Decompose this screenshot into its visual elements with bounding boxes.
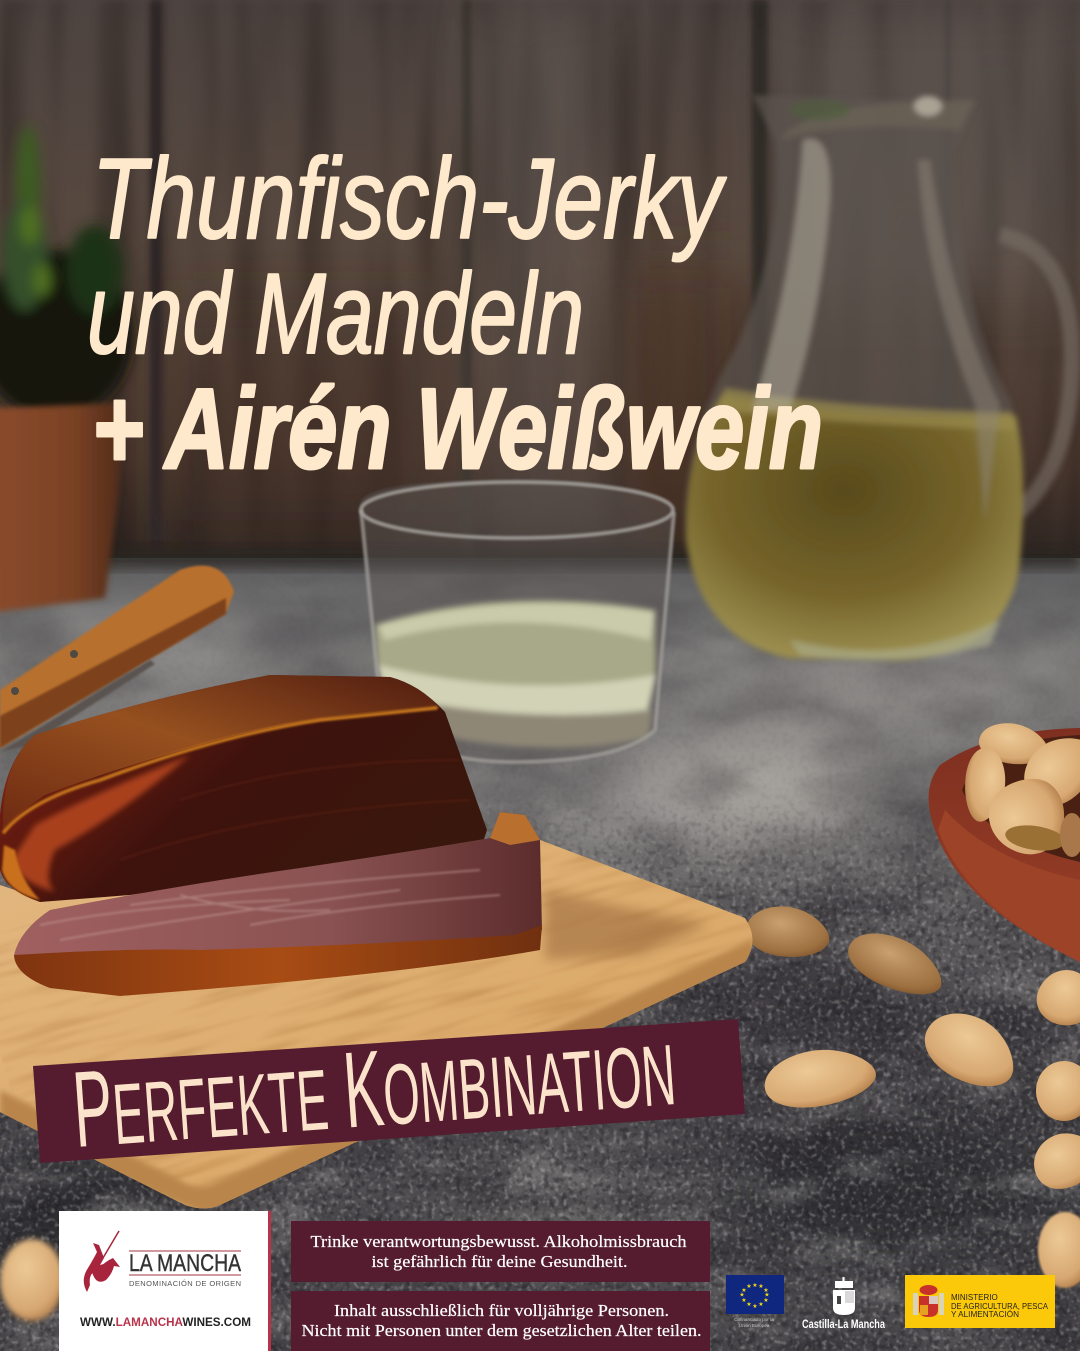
logo: Ministerio: Y ALIMENTACIÓN [951, 1310, 1019, 1319]
title line 2: und Mandeln [87, 251, 584, 378]
logo panel: La Mancha [59, 1211, 271, 1351]
background: stone counter [0, 548, 1080, 1351]
logo text: LA MANCHA [129, 1250, 241, 1277]
notice: legal age: Inhalt ausschließlich für volljährige Personen. [334, 1301, 669, 1320]
logo: European Union: Cofinanciado por la [734, 1317, 774, 1322]
logo: European Union: ★ [758, 1301, 764, 1308]
background: wooden wall [0, 0, 1080, 575]
logo: European Union: ★ [739, 1292, 745, 1298]
logo: Castilla-La Mancha [802, 1277, 885, 1331]
notice: responsible drinking: ist gefährlich für deine Gesundheit. [372, 1252, 628, 1271]
icon: knight on horse [84, 1231, 120, 1292]
plant pot with herbs [0, 125, 133, 612]
logo: European Union: ★ [752, 1303, 758, 1310]
terracotta pot [0, 403, 125, 612]
logo: Castilla-La Mancha: Castilla-La Mancha [802, 1319, 885, 1331]
logo: European Union [726, 1275, 784, 1328]
almonds in bowl [962, 718, 1080, 864]
logo: European Union: Unión Europea [739, 1323, 770, 1328]
logo: Ministerio: MINISTERIO [951, 1293, 998, 1302]
logo: European Union: ★ [741, 1287, 747, 1294]
logo: European Union: ★ [758, 1283, 764, 1290]
notice: responsible drinking [291, 1221, 710, 1282]
almond bowl [929, 718, 1080, 962]
loose almonds [0, 901, 1080, 1321]
icon: Spanish coat of arms [913, 1285, 944, 1317]
logo: European Union: ★ [746, 1301, 752, 1308]
tuna jerky chunk [0, 675, 487, 902]
title [87, 136, 823, 493]
notice: legal age [291, 1291, 710, 1351]
title line 3: + Airén Weißwein [92, 366, 823, 493]
banner: Perfekte Kombination: PERFEKTE KOMBINATION [69, 1006, 679, 1170]
logo: Ministerio: DE AGRICULTURA, PESCA [951, 1302, 1049, 1311]
title line 1: Thunfisch-Jerky [92, 136, 727, 263]
logo: European Union: ★ [746, 1283, 752, 1290]
tuna jerky slice [14, 812, 542, 996]
logo: European Union: ★ [764, 1292, 770, 1298]
logo text [129, 1250, 241, 1288]
notice: legal age: Nicht mit Personen unter dem gesetzlichen Alter teilen. [302, 1321, 702, 1340]
logo: European Union: ★ [763, 1297, 769, 1304]
logo: European Union: ★ [752, 1282, 758, 1289]
logo: European Union: ★ [763, 1287, 769, 1294]
website url: WWW.LAMANCHAWINES.COM [80, 1317, 251, 1329]
knife [0, 566, 234, 752]
carafe of white wine [685, 95, 1072, 662]
logo: Ministerio [905, 1275, 1055, 1328]
logo: European Union: ★ [741, 1297, 747, 1304]
logo text: DENOMINACIÓN DE ORIGEN [129, 1279, 241, 1288]
cutting board [0, 840, 752, 1208]
notice: responsible drinking: Trinke verantwortungsbewusst. Alkoholmissbrauch [310, 1232, 687, 1251]
water glass with white wine [360, 480, 675, 762]
